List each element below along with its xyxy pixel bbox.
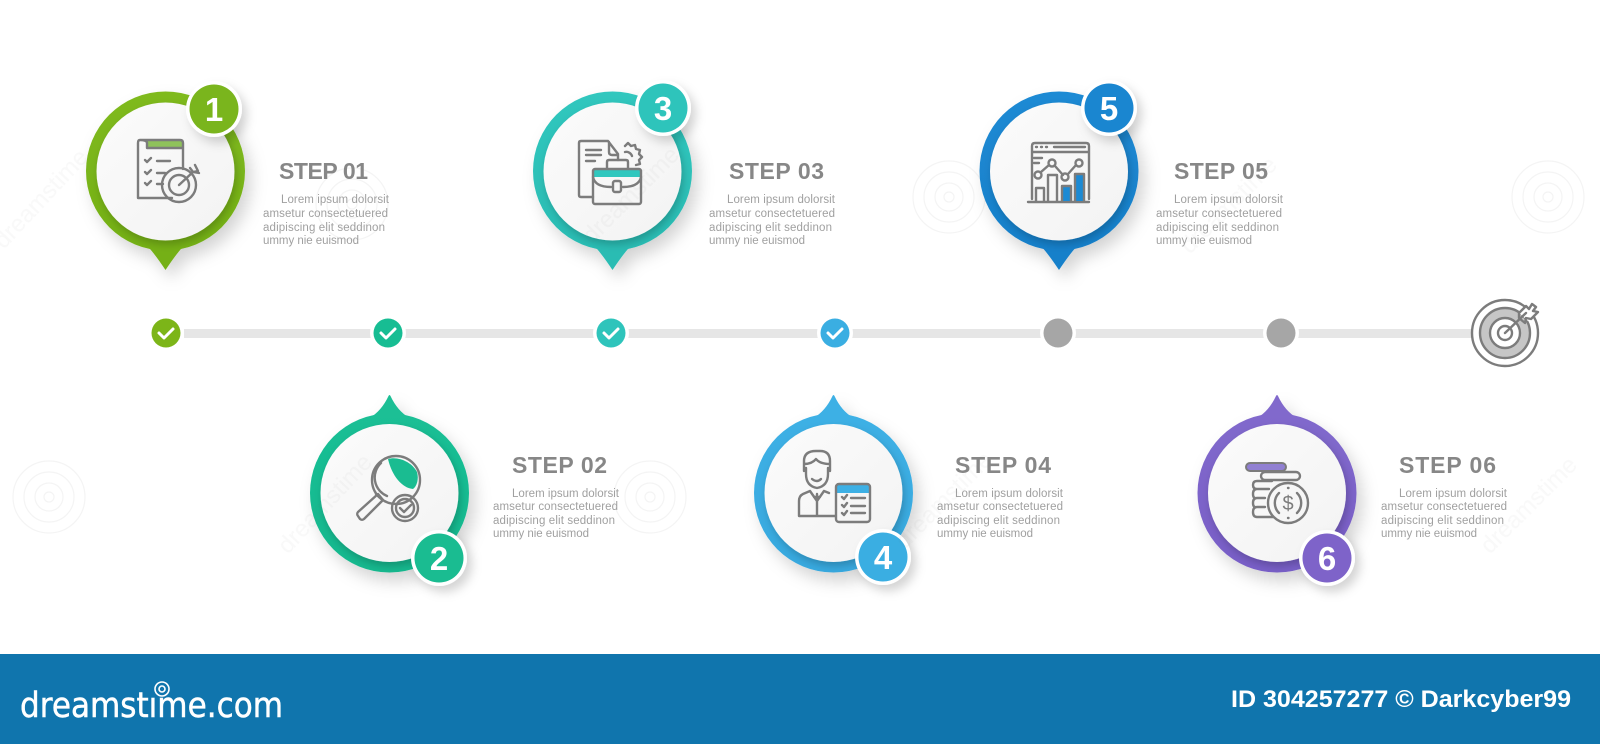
pin 2 xyxy=(310,395,469,572)
watermark text: dreamstime xyxy=(1475,451,1583,559)
badge 1: 1 xyxy=(205,91,223,128)
text block: step 04: Lorem ipsum dolorsit xyxy=(955,488,1064,500)
timeline node 1 xyxy=(148,315,184,351)
badge 5: 5 xyxy=(1100,90,1118,127)
badge 1 xyxy=(186,81,242,137)
pin 5 xyxy=(980,92,1138,270)
panel: step 1 xyxy=(86,81,390,270)
badge 3 xyxy=(635,80,691,136)
panel: step 3 xyxy=(533,80,836,270)
background watermark spirals xyxy=(13,161,1584,533)
text block: step 05 xyxy=(1156,194,1284,247)
timeline node 3 xyxy=(593,315,629,351)
text block: step 03 xyxy=(709,194,836,247)
timeline node 2 xyxy=(370,315,406,351)
watermark text: dreamstime xyxy=(273,449,378,559)
text block: step 04: amsetur consectetuered xyxy=(937,501,1063,513)
text block: step 01: amsetur consectetuered xyxy=(263,208,388,220)
text block: step 03: adipiscing elit seddinon xyxy=(709,222,832,234)
text block: step 06: ummy nie euismod xyxy=(1381,528,1477,540)
badge 5 xyxy=(1081,80,1137,136)
icon: document, gear and briefcase xyxy=(579,141,642,204)
panel: step 5 xyxy=(980,80,1284,270)
icon: coin stack with dollar xyxy=(1246,463,1308,523)
icon: end target xyxy=(1472,300,1538,366)
text block: step 05: amsetur consectetuered xyxy=(1156,208,1282,220)
pin 3 xyxy=(533,92,692,270)
text block: step 06: Lorem ipsum dolorsit xyxy=(1399,488,1508,500)
text block: step 01 xyxy=(263,194,390,247)
icon: logo spiral xyxy=(155,682,169,696)
badge 2: 2 xyxy=(430,540,448,577)
text block: step 04 xyxy=(937,488,1064,540)
heading: step 02: STEP 02 xyxy=(512,452,607,478)
text block: step 05: ummy nie euismod xyxy=(1156,235,1252,247)
timeline node 6 xyxy=(1263,315,1299,351)
timeline xyxy=(148,300,1538,366)
heading: step 01: STEP 01 xyxy=(279,158,368,184)
text block: step 04: ummy nie euismod xyxy=(937,528,1033,540)
text block: step 06: amsetur consectetuered xyxy=(1381,501,1507,513)
badge 2 xyxy=(411,530,467,586)
text block: step 01: adipiscing elit seddinon xyxy=(263,222,385,234)
badge 4: 4 xyxy=(874,539,893,576)
icon: browser chart xyxy=(1028,143,1089,202)
brand logo: dreamstıme.com xyxy=(20,686,283,726)
pin 1 xyxy=(86,92,245,270)
text block: step 02: ummy nie euismod xyxy=(493,528,589,540)
panel: step 2 xyxy=(310,395,620,586)
footer banner xyxy=(0,654,1600,744)
text block: step 02: Lorem ipsum dolorsit xyxy=(512,488,620,500)
heading: step 04: STEP 04 xyxy=(955,452,1051,478)
timeline node 4 xyxy=(817,315,853,351)
text block: step 02: amsetur consectetuered xyxy=(493,501,618,513)
text block: step 05: adipiscing elit seddinon xyxy=(1156,222,1279,234)
text block: step 03: Lorem ipsum dolorsit xyxy=(727,194,836,206)
watermark text xyxy=(0,141,1583,559)
watermark text: dreamstime xyxy=(890,446,998,554)
heading: step 06: STEP 06 xyxy=(1399,452,1496,478)
text block: step 03: amsetur consectetuered xyxy=(709,208,835,220)
text block: step 01: ummy nie euismod xyxy=(263,235,359,247)
text block: step 06: adipiscing elit seddinon xyxy=(1381,515,1504,527)
heading: step 03: STEP 03 xyxy=(729,158,824,184)
pin 4 xyxy=(754,395,913,572)
badge 3: 3 xyxy=(654,90,672,127)
panel: step 4 xyxy=(754,395,1064,585)
text block: step 06 xyxy=(1381,488,1508,540)
text block: step 02: adipiscing elit seddinon xyxy=(493,515,615,527)
icon: magnifier with check xyxy=(357,456,420,521)
badge 6: 6 xyxy=(1318,540,1336,577)
panel: step 6 xyxy=(1198,395,1508,586)
text block: step 04: adipiscing elit seddinon xyxy=(937,515,1060,527)
text block: step 02 xyxy=(493,488,620,540)
icon: coin stack with dollar: $ xyxy=(1282,493,1294,515)
badge 6 xyxy=(1299,530,1355,586)
icon: checklist and target xyxy=(138,140,199,202)
pin 6 xyxy=(1198,395,1356,572)
watermark text: dreamstime xyxy=(577,141,685,249)
heading: step 05: STEP 05 xyxy=(1174,158,1268,184)
text block: step 03: ummy nie euismod xyxy=(709,235,805,247)
icon: businessman with checklist xyxy=(799,451,870,522)
timeline node 5 xyxy=(1040,315,1076,351)
text block: step 05: Lorem ipsum dolorsit xyxy=(1174,194,1284,206)
image id and credit: ID 304257277 © Darkcyber99 xyxy=(1231,686,1571,713)
text block: step 01: Lorem ipsum dolorsit xyxy=(281,194,390,206)
badge 4 xyxy=(855,529,911,585)
watermark text: dreamstime xyxy=(1175,151,1283,259)
timeline track xyxy=(184,329,1474,338)
